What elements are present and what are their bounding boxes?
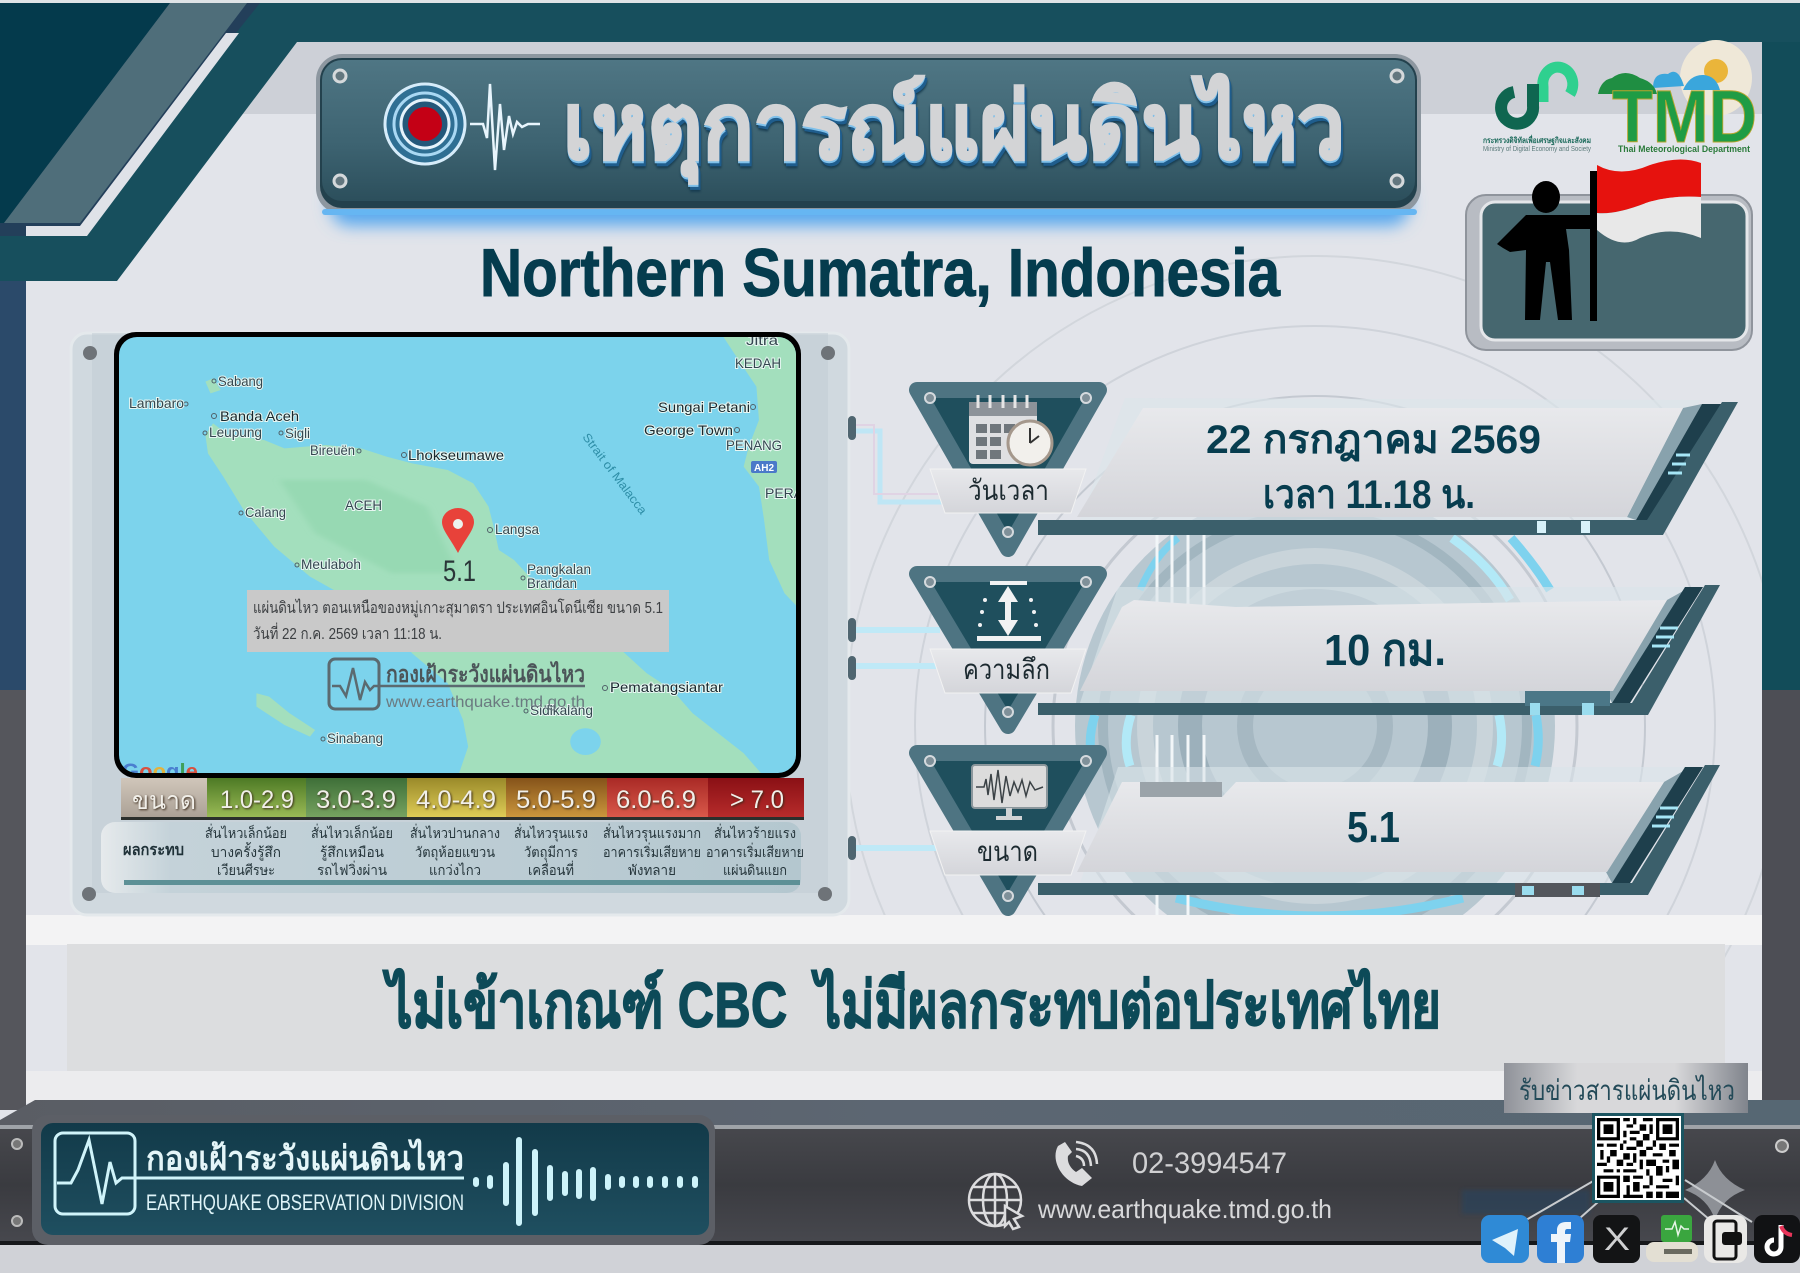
icon: telegram (1481, 1215, 1529, 1263)
contact: website: www.earthquake.tmd.go.th (1037, 1194, 1332, 1224)
legend: impact table: วัตถุมีการ (524, 844, 578, 861)
row: depth (917, 574, 1720, 726)
map labels: PERA (765, 485, 804, 501)
map labels: George Town (644, 422, 733, 438)
map labels: Sabang (218, 373, 263, 389)
connectors from map to rows (852, 420, 945, 856)
contact: phone: 02-3994547 (1132, 1147, 1287, 1180)
legend: impact table (101, 822, 804, 893)
icon: seismograph monitor (972, 765, 1047, 820)
legend: impact table: เวียนศีรษะ (217, 862, 275, 878)
map labels: Leupung (209, 424, 262, 440)
value: date: 22 กรกฎาคม 2569 (1206, 418, 1541, 462)
map caption box: แผ่นดินไหว ตอนเหนือของหมู่เกาะสุมาตรา ประเทศอินโดนีเซีย ขนาด 5.1 (253, 598, 663, 618)
triangle badge: ความลึก (963, 654, 1050, 685)
map caption box (247, 590, 669, 652)
legend: magnitude scale: 1.0-2.9 (220, 786, 294, 814)
top frame band (0, 0, 1800, 281)
legend: impact table: วัตถุห้อยแขวน (415, 844, 495, 861)
icon: X (1593, 1215, 1640, 1263)
logo: TMD: Thai Meteorological Department (1618, 144, 1750, 154)
legend: impact table: ผลกระทบ (123, 842, 184, 859)
QR code (1592, 1113, 1684, 1203)
logo: TMD (1598, 40, 1757, 158)
grey diagonal strip (4, 3, 247, 223)
panel: country flag icon (1466, 159, 1752, 350)
news heading plate (1504, 1063, 1748, 1113)
value plate (1080, 600, 1667, 691)
icon: person (1497, 171, 1597, 321)
icon: X: X (1604, 1221, 1630, 1257)
icon: seismic target (385, 84, 540, 170)
legend: impact table: สั่นไหวปานกลาง (410, 824, 500, 841)
map watermark: www.earthquake.tmd.go.th (385, 694, 585, 711)
map (114, 332, 804, 784)
row: magnitude (917, 753, 1720, 908)
map labels: Langsa (495, 521, 539, 537)
icon: seismograph box (55, 1133, 464, 1214)
map labels: Bireuën (310, 442, 355, 458)
icon: depth arrow (977, 581, 1041, 641)
label plate (930, 469, 1086, 513)
map labels (122, 332, 804, 784)
icon: waveform (476, 1140, 695, 1223)
map watermark: กองเฝ้าระวังแผ่นดินไหว (386, 660, 585, 687)
icon: tiktok (1754, 1215, 1800, 1263)
news heading plate: รับข่าวสารแผ่นดินไหว (1519, 1075, 1735, 1106)
value: depth: 10 กม. (1324, 626, 1446, 675)
legend: impact table: อาคารเริ่มเสียหาย (603, 843, 701, 860)
legend: magnitude scale: 4.0-4.9 (416, 786, 496, 814)
legend: magnitude scale (121, 778, 804, 820)
banner: CBC statement (67, 944, 1725, 1071)
legend: magnitude scale: 6.0-6.9 (616, 786, 696, 814)
footer bar (0, 1100, 1800, 1245)
legend: impact table: สั่นไหวเล็กน้อย (311, 824, 393, 841)
icon: app (1646, 1215, 1698, 1262)
legend: magnitude scale: 3.0-3.9 (316, 786, 396, 814)
background concentric rings (845, 256, 1785, 1196)
division name: กองเฝ้าระวังแผ่นดินไหว (146, 1138, 464, 1178)
map labels: Banda Aceh (220, 408, 299, 424)
land (205, 337, 797, 777)
value: magnitude: 5.1 (1347, 803, 1400, 852)
icon: flag (1597, 159, 1701, 242)
row: date and time (917, 390, 1738, 549)
magnitude on map: 5.1 (443, 555, 476, 588)
logo: digital ministry: กระทรวงดิจิทัลเพื่อเศรษฐกิจและสังคม (1483, 134, 1591, 146)
logo: TMD: TMD (1612, 75, 1757, 158)
contact: website (969, 1174, 1332, 1229)
map labels: Sinabang (327, 730, 383, 746)
map watermark (329, 659, 585, 711)
legend: impact table: สั่นไหวร้ายแรง (714, 824, 796, 841)
social icons (1481, 1215, 1800, 1263)
map labels: Lhokseumawe (408, 447, 504, 463)
panel: glass map frame (71, 332, 849, 915)
rivets (334, 70, 1403, 187)
legend: impact table: อาคารเริ่มเสียหาย (706, 843, 804, 860)
icon: facebook (1537, 1215, 1584, 1263)
map labels: PENANG (726, 437, 782, 453)
panel: division display: EARTHQUAKE OBSERVATION DIVISION (146, 1190, 464, 1215)
map labels: Pangkalan (527, 561, 591, 577)
legend: impact table: สั่นไหวเล็กน้อย (205, 824, 287, 841)
map labels: Strait of Malacca (580, 430, 650, 517)
logo: digital ministry (1483, 67, 1591, 153)
logo: digital ministry: Ministry of Digital Economy and Society (1483, 146, 1591, 153)
legend: magnitude scale: 5.0-5.9 (516, 786, 596, 814)
triangle badge: ขนาด (977, 836, 1038, 867)
map labels: Sidikalang (530, 702, 593, 718)
map labels: KEDAH (735, 355, 781, 371)
value plate (1077, 782, 1664, 872)
row frame (1038, 585, 1720, 715)
legend: magnitude scale: > 7.0 (730, 786, 784, 814)
map labels: Google (122, 759, 198, 784)
banner: CBC statement: ไม่เข้าเกณฑ์ CBC ไม่มีผลกระทบต่อประเทศไทย (382, 968, 1441, 1041)
legend: impact table: รถไฟวิ่งผ่าน (317, 861, 387, 878)
map labels: AH2 (754, 463, 774, 474)
title text: เหตุการณ์แผ่นดินไหว (563, 74, 1345, 184)
legend: impact table: บางครั้งรู้สึก (211, 842, 281, 861)
triangle badge (917, 390, 1099, 549)
map labels: Sigli (285, 425, 310, 441)
legend: impact table: เคลื่อนที่ (528, 861, 574, 878)
triangle badge (917, 753, 1099, 908)
icon: calendar clock (969, 395, 1052, 465)
map labels: Sungai Petani (658, 399, 750, 415)
map labels: Meulaboh (301, 556, 361, 572)
icon: phone (1055, 1142, 1097, 1186)
map labels: ACEH (345, 497, 382, 513)
legend: impact table: สั่นไหวรุนแรง (514, 824, 588, 842)
label plate (930, 831, 1086, 875)
map labels: Pematangsiantar (610, 679, 723, 695)
panel: division display (32, 1115, 715, 1245)
legend: impact table: แผ่นดินแยก (723, 862, 787, 878)
value: time: เวลา 11.18 น. (1263, 473, 1475, 517)
row frame (1038, 398, 1738, 535)
map labels: Jitra (746, 332, 778, 348)
light diagonal strip (26, 33, 239, 236)
legend: impact table: รู้สึกเหมือน (320, 844, 384, 861)
subtitle: location: Northern Sumatra, Indonesia (480, 235, 1281, 311)
contact: phone (1055, 1142, 1287, 1186)
icon: messaging phone (1704, 1215, 1747, 1263)
dark corner (0, 3, 260, 236)
light horizontal bands (0, 915, 1800, 1103)
map labels: Brandan (527, 575, 577, 591)
map labels: Calang (245, 504, 286, 520)
triangle badge: วันเวลา (968, 475, 1049, 506)
map caption box: วันที่ 22 ก.ค. 2569 เวลา 11:18 น. (253, 622, 442, 643)
icon: epicentre pin (442, 508, 474, 553)
icon: globe (969, 1174, 1022, 1229)
title plate (316, 54, 1421, 226)
legend: impact table: พังทลาย (628, 862, 676, 878)
legend: magnitude scale: ขนาด (132, 787, 196, 815)
legend: impact table: สั่นไหวรุนแรงมาก (603, 824, 701, 842)
label plate (930, 649, 1086, 693)
legend: impact table: แกว่งไกว (429, 862, 481, 878)
map labels: Lambaro (129, 395, 184, 411)
row frame (1038, 765, 1720, 897)
value plate (1077, 408, 1683, 517)
connector lines QR to icons (1526, 1180, 1752, 1222)
triangle badge (917, 574, 1099, 726)
